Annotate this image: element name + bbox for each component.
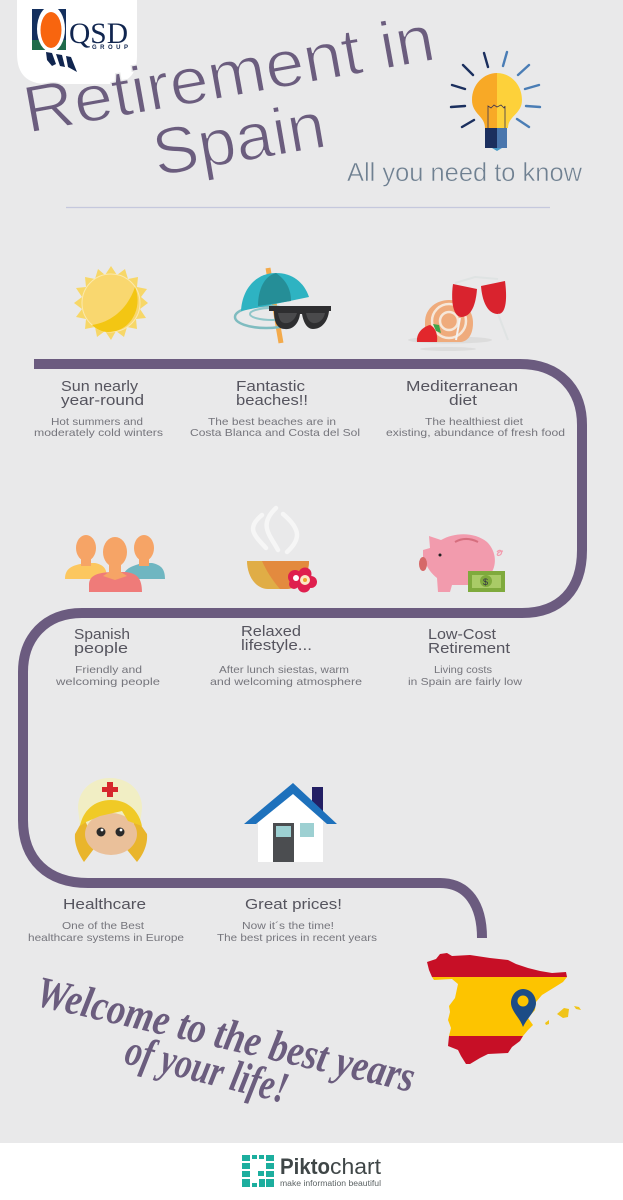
feature: spanish people: welcoming people [55, 676, 160, 688]
icon: house [244, 783, 337, 862]
feature: spanish people: people [74, 640, 128, 657]
feature: healthcare: healthcare systems in Europe [28, 932, 184, 944]
logo: QSD Group: QSD [69, 17, 128, 50]
feature: mediterranean diet [386, 378, 565, 439]
feature: mediterranean diet: Mediterranean [406, 378, 518, 395]
feature: sun nearly year-round [34, 378, 163, 439]
title: Retirement in Spain: Retirement in [17, 0, 440, 147]
Piktochart logo: Pikto [280, 1154, 330, 1179]
feature: relaxed lifestyle: After lunch siestas, warm [219, 664, 349, 676]
logo: QSD Group: GROUP [92, 45, 128, 51]
feature: fantastic beaches [190, 378, 360, 439]
winding path [23, 364, 582, 938]
icon: piggy bank with money: $ [483, 577, 488, 587]
footer band [0, 1143, 623, 1200]
feature: sun nearly year-round: year-round [61, 392, 144, 409]
icon: map of Spain with pin [427, 953, 581, 1064]
feature: mediterranean diet: existing, abundance of fresh food [386, 427, 565, 439]
feature: low-cost retirement: Low-Cost [428, 626, 497, 643]
feature: great prices: Now it´s the time! [242, 920, 334, 932]
icon: wine glasses and cake roll [408, 277, 508, 351]
subtitle: All you need to know [347, 157, 582, 187]
feature: relaxed lifestyle: lifestyle... [241, 637, 312, 654]
feature: fantastic beaches: Fantastic [236, 378, 306, 395]
feature: relaxed lifestyle: Relaxed [241, 623, 301, 640]
feature: healthcare [28, 896, 184, 944]
feature: sun nearly year-round: moderately cold winters [34, 427, 163, 439]
feature: low-cost retirement [408, 626, 522, 688]
feature: mediterranean diet: The healthiest diet [425, 416, 523, 428]
feature: low-cost retirement: Retirement [428, 640, 511, 657]
feature: spanish people [55, 626, 160, 688]
icon: sun [74, 266, 148, 340]
logo: QSD Group [17, 0, 137, 84]
feature: relaxed lifestyle: and welcoming atmosphere [210, 676, 362, 688]
closing message: of your life! [121, 1025, 294, 1113]
feature: great prices [217, 896, 377, 944]
icon: nurse [75, 778, 147, 862]
Piktochart logo [242, 1154, 381, 1188]
feature: mediterranean diet: diet [449, 392, 478, 409]
feature: sun nearly year-round: Sun nearly [61, 378, 139, 395]
feature: great prices: Great prices! [245, 896, 342, 913]
closing message: Welcome to the best years [32, 967, 420, 1102]
feature: fantastic beaches: Costa Blanca and Costa del Sol [190, 427, 360, 439]
feature: healthcare: Healthcare [63, 896, 146, 913]
feature: healthcare: One of the Best [62, 920, 144, 932]
feature: relaxed lifestyle [210, 623, 362, 688]
feature: fantastic beaches: The best beaches are in [208, 416, 336, 428]
feature: low-cost retirement: in Spain are fairly low [408, 676, 522, 688]
feature: spanish people: Spanish [74, 626, 130, 643]
Piktochart logo: make information beautiful [280, 1179, 381, 1188]
icon: people [65, 535, 165, 592]
Piktochart logo: chart [330, 1154, 381, 1179]
feature: great prices: The best prices in recent years [217, 932, 377, 944]
feature: spanish people: Friendly and [75, 664, 142, 676]
feature: fantastic beaches: beaches!! [236, 392, 308, 409]
feature: sun nearly year-round: Hot summers and [51, 416, 143, 428]
icon: steaming bowl with flower [247, 508, 317, 592]
title: Retirement in Spain: Spain [147, 87, 331, 190]
icon: beach umbrella and sunglasses [235, 268, 331, 343]
icon: light bulb [451, 52, 540, 151]
icon: piggy bank with money [419, 534, 505, 592]
feature: low-cost retirement: Living costs [434, 664, 492, 676]
